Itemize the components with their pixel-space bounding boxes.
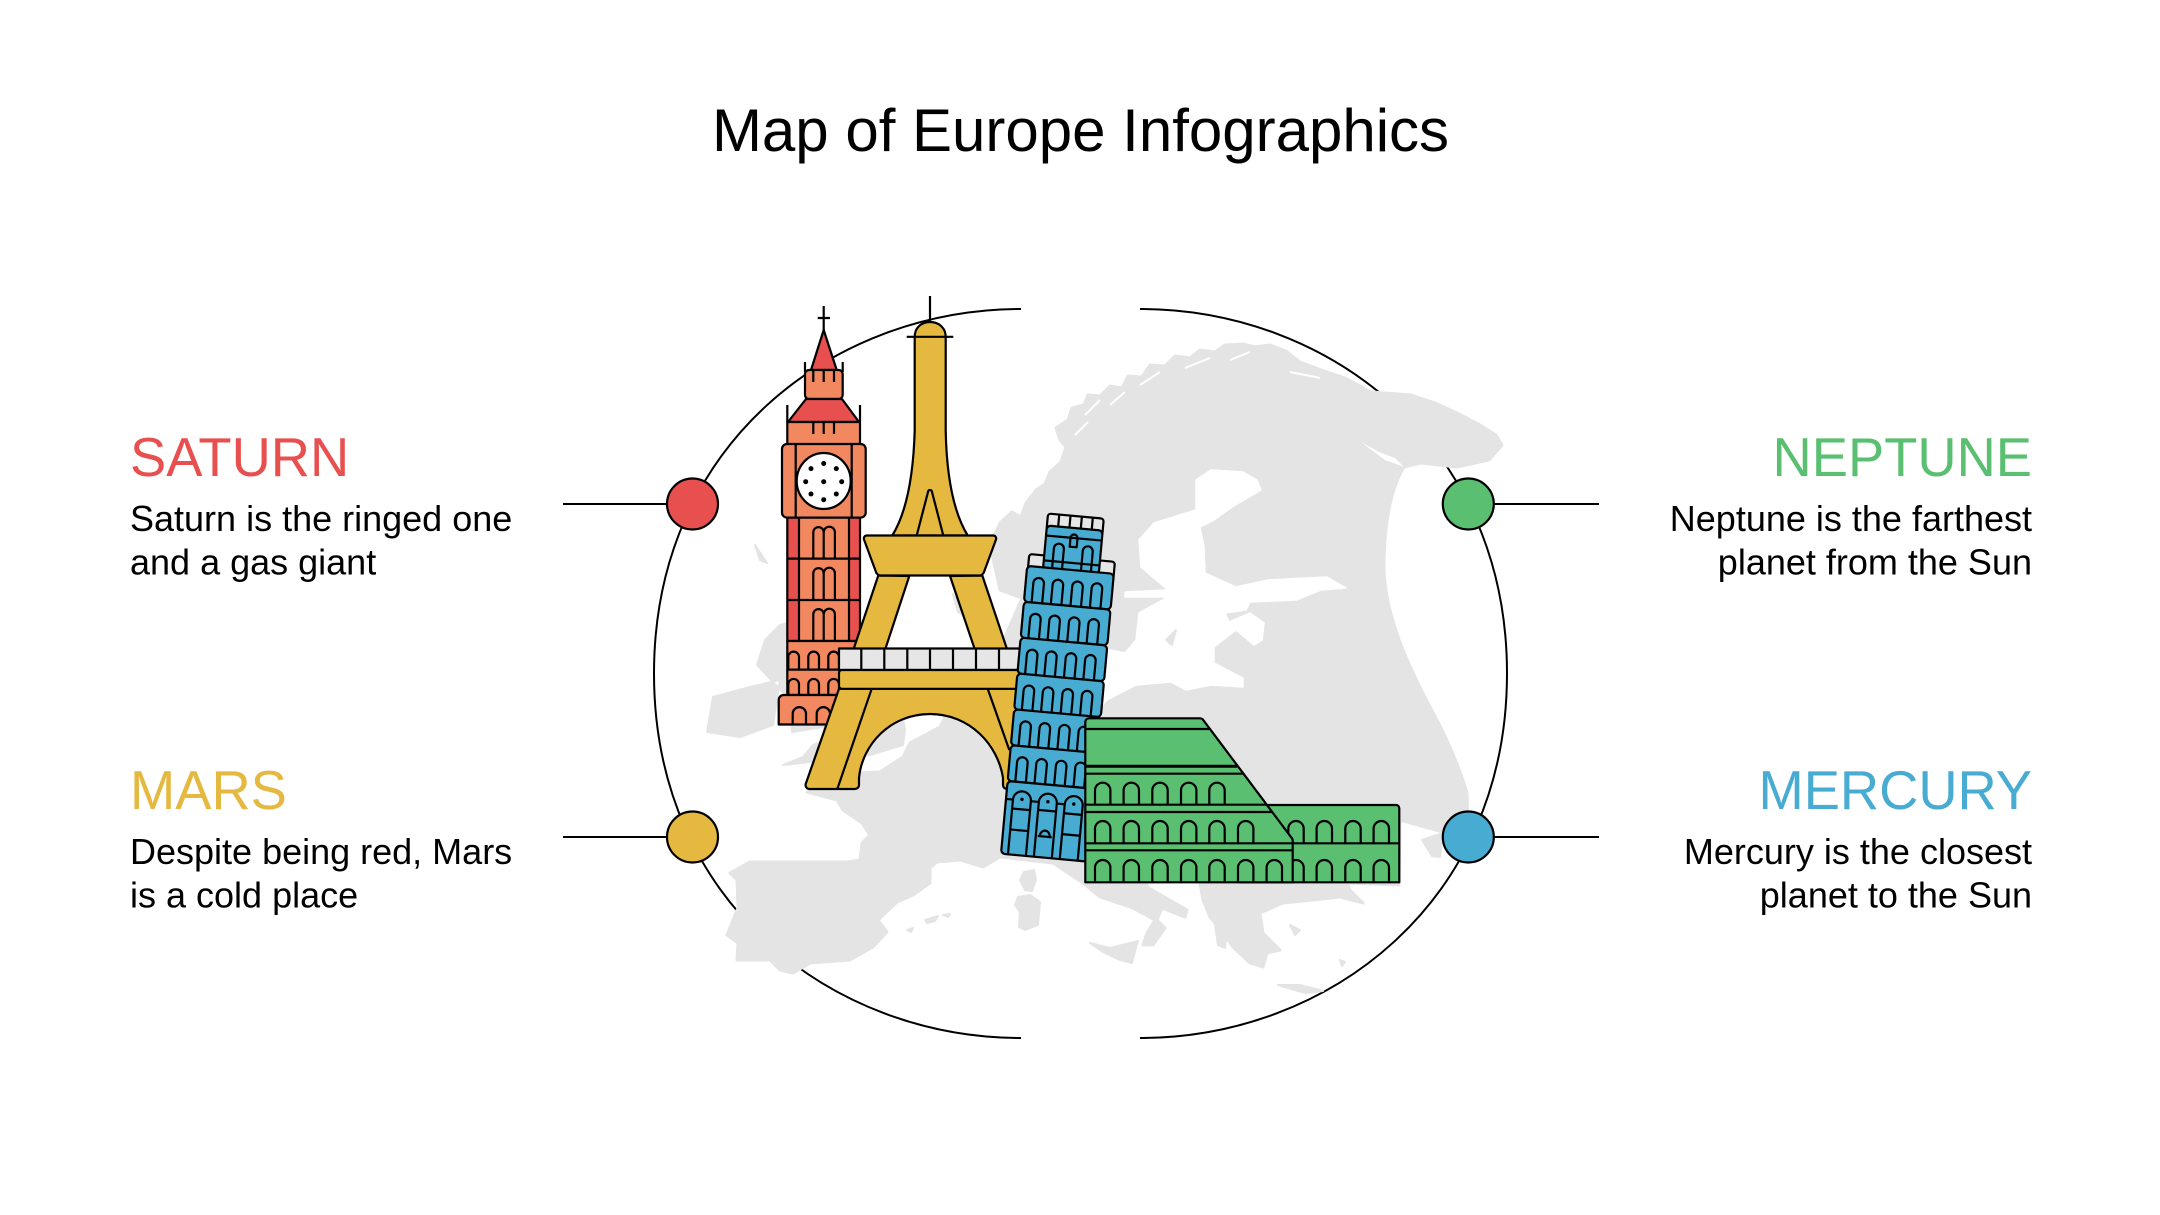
tower base [1001,781,1094,862]
map of Europe [707,344,1502,993]
text block: Neptune: Neptune is the farthest [1670,498,2032,539]
text block: Mars: MARS [130,760,287,821]
text block: Saturn: SATURN [130,427,349,488]
text block: Saturn: and a gas giant [130,542,376,582]
marker: Mercury [1443,812,1494,862]
text block: Mars: is a cold place [130,874,358,916]
text block: Neptune [1670,427,2032,582]
text block: Neptune: NEPTUNE [1773,427,2032,488]
white sea inlet [1361,442,1404,467]
connector lines [563,504,1599,837]
icon: Eiffel Tower [806,296,1060,789]
text block: Mercury: MERCURY [1758,760,2032,821]
text block: Mercury: Mercury is the closest [1684,831,2032,872]
text block: Saturn [130,427,512,582]
text block: Saturn: Saturn is the ringed one [130,498,512,539]
text block: Mercury [1684,760,2032,916]
islands and British Isles [707,545,1443,993]
text block: Mars [130,760,512,916]
tower tiers [1008,566,1114,789]
text block: Neptune: planet from the Sun [1718,542,2032,582]
fjord flecks [1075,352,1320,435]
icon: Big Ben [779,306,866,724]
marker: Saturn [667,478,718,530]
marker: Neptune [1443,478,1494,530]
marker: Mars [667,812,718,862]
title: Map of Europe Infographics [712,97,1449,164]
text block: Mars: Despite being red, Mars [130,831,512,872]
icon: Colosseum [1085,718,1399,882]
text block: Mercury: planet to the Sun [1760,874,2032,916]
clock [797,453,851,509]
ring outline [654,309,1507,1038]
icon: Leaning Tower of Pisa [1001,512,1119,862]
observation deck [839,648,1020,670]
sea: Baltic [1070,470,1346,718]
